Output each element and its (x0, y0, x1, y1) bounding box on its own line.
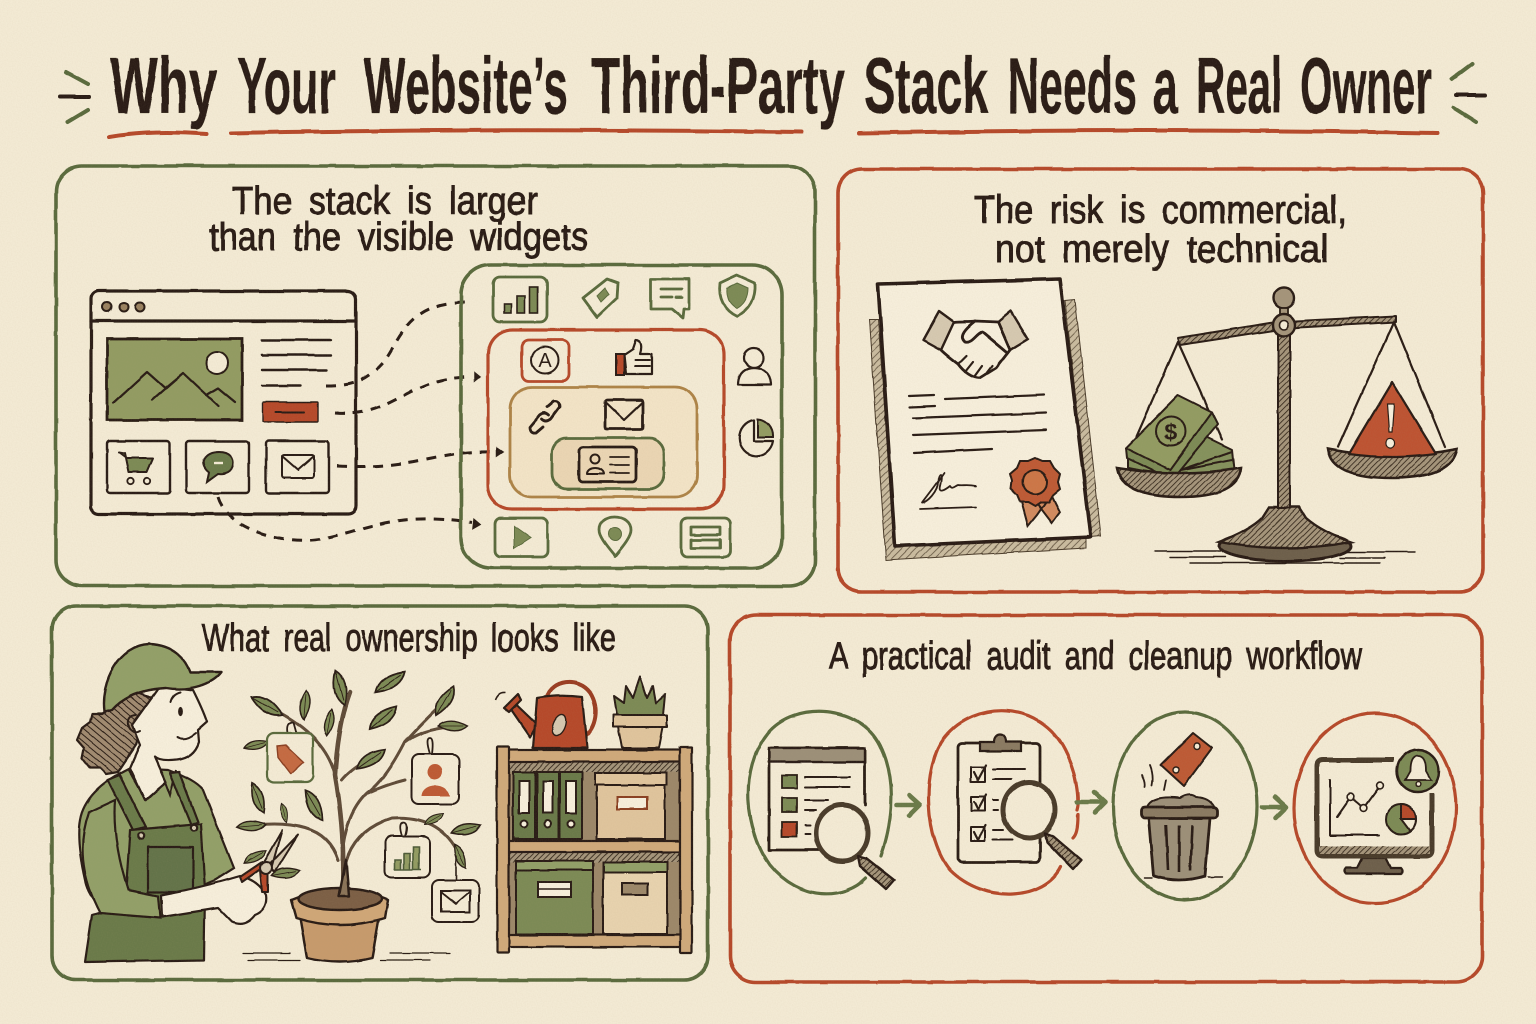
panel 4 heading: A practical audit and cleanup workflow (829, 635, 1363, 678)
shelf frame (497, 747, 692, 953)
monitor stand (1344, 858, 1402, 874)
video icon (495, 518, 548, 557)
magnifier (816, 805, 894, 889)
panel 2 heading (974, 189, 1347, 271)
step 4 outline (1294, 713, 1456, 903)
shield icon (720, 275, 755, 316)
browser list (769, 748, 865, 850)
red layer (488, 330, 724, 509)
motion lines (1142, 765, 1166, 790)
leaves (236, 667, 482, 880)
panel 1 frame (56, 166, 815, 586)
gardener figure (77, 644, 298, 962)
dashed connector arrows (218, 302, 503, 540)
third-party stack container (461, 265, 782, 568)
thumbs up icon (616, 340, 652, 375)
shirt (79, 768, 234, 925)
potted plant with hanging tags (236, 667, 482, 962)
step 2: checklist review (929, 711, 1081, 894)
hero image with mountains (107, 339, 242, 420)
handshake icon (923, 311, 1028, 378)
scale base (1219, 507, 1351, 561)
website browser window (91, 291, 356, 514)
green storage box (516, 861, 593, 934)
title: Why (110, 41, 217, 130)
left pan with money (1117, 342, 1241, 497)
right accent marks (1452, 64, 1485, 122)
pivot and finial (1273, 288, 1295, 336)
cart widget (107, 441, 170, 493)
step 3 outline (1113, 712, 1257, 900)
scale beam (1178, 316, 1396, 345)
chat widget (186, 441, 249, 493)
warning triangle (1349, 382, 1436, 457)
collar (128, 768, 176, 800)
map pin icon (599, 517, 631, 556)
panel 2 heading: not merely technical (995, 228, 1328, 271)
alert bell (1397, 750, 1439, 792)
orange layer (510, 387, 697, 497)
ad icon: A (538, 350, 552, 372)
call to action button (263, 402, 318, 422)
step 1 outline (748, 711, 891, 894)
magnifier (1003, 782, 1081, 869)
sleeve (83, 800, 160, 918)
tag: mail (432, 856, 479, 922)
arrow 1 (897, 795, 920, 816)
pie chart (1386, 804, 1416, 834)
scale post (1278, 335, 1290, 508)
overalls (85, 772, 205, 962)
clipboard (958, 734, 1040, 862)
pie chart icon (739, 419, 773, 456)
text lines (262, 340, 331, 386)
title: Third-Party (591, 41, 845, 130)
cap (103, 644, 221, 712)
mail widget (266, 441, 329, 493)
left pan bowl (1117, 468, 1241, 497)
document shadow (869, 299, 1101, 560)
panel 3 frame (52, 606, 708, 980)
tan storage box (603, 862, 667, 934)
hand (161, 876, 266, 924)
mail icon (605, 400, 643, 429)
step 2 outline (929, 711, 1078, 894)
ground shading (1155, 551, 1415, 563)
panel: practical audit and cleanup workflow (730, 615, 1482, 982)
panel 2 frame (838, 169, 1483, 592)
panel: the stack is larger than the visible widgets (56, 166, 815, 586)
panel 4 frame (730, 615, 1482, 982)
title block (60, 41, 1485, 137)
title: a (1153, 41, 1178, 130)
panel: what real ownership looks like (52, 606, 708, 980)
face (130, 686, 207, 800)
signature (920, 473, 976, 509)
arrow 3 (1262, 797, 1286, 818)
right pan with warning (1328, 322, 1457, 478)
panel 1 heading: The stack is larger (232, 180, 538, 223)
link icon (530, 401, 560, 433)
binders (513, 772, 582, 839)
contract text lines (909, 395, 1046, 453)
panel: the risk is commercial (838, 169, 1483, 592)
trash bin (1141, 795, 1217, 880)
ear and facial features (128, 692, 196, 739)
profile card icon (579, 447, 636, 482)
panel 1 heading: than the visible widgets (209, 216, 588, 259)
money stack: $ (1164, 419, 1178, 446)
right pan bowl (1328, 449, 1457, 478)
panel 3 heading: What real ownership looks like (202, 617, 616, 660)
money stack (1126, 395, 1234, 480)
title: Stack (864, 41, 988, 130)
tag: chart (385, 822, 430, 878)
layout card icon (681, 518, 730, 557)
arrow 2 (1077, 792, 1105, 813)
hair (77, 690, 158, 774)
tag icon (583, 279, 618, 317)
title: Your (237, 41, 336, 130)
step 4: monitor (1294, 713, 1456, 903)
pruning shears (240, 830, 298, 892)
ground shading (243, 953, 450, 960)
panel 2 heading: The risk is commercial, (974, 189, 1347, 232)
title: Needs (1008, 41, 1137, 130)
document sheet (878, 279, 1091, 546)
innermost green layer (552, 438, 664, 489)
upper storage box (595, 773, 667, 839)
analytics icon (493, 277, 547, 322)
user icon (738, 348, 771, 385)
title: Website’s (364, 41, 568, 130)
monitor screen (1315, 758, 1434, 858)
line chart (1330, 780, 1383, 835)
contract document (869, 279, 1101, 560)
watering can (495, 682, 596, 748)
ad icon (522, 340, 569, 381)
wax seal with ribbon (1010, 458, 1060, 526)
tag: price (267, 722, 313, 782)
left accent marks (60, 72, 89, 122)
tag: person (412, 738, 459, 804)
potted succulent (613, 677, 667, 748)
ground line (1145, 877, 1222, 878)
panel 1 heading (209, 180, 588, 259)
shelf with supplies (495, 677, 692, 953)
message icon (651, 279, 689, 318)
step 3: remove unused (1113, 712, 1257, 900)
balance scale (1117, 288, 1457, 563)
title underlines (109, 130, 1438, 137)
title: Real (1196, 41, 1282, 130)
discarded tag (1161, 733, 1212, 786)
branches (255, 692, 458, 893)
step 1: inventory scan (748, 711, 894, 894)
shelf back (505, 760, 685, 940)
flower pot (291, 860, 388, 962)
